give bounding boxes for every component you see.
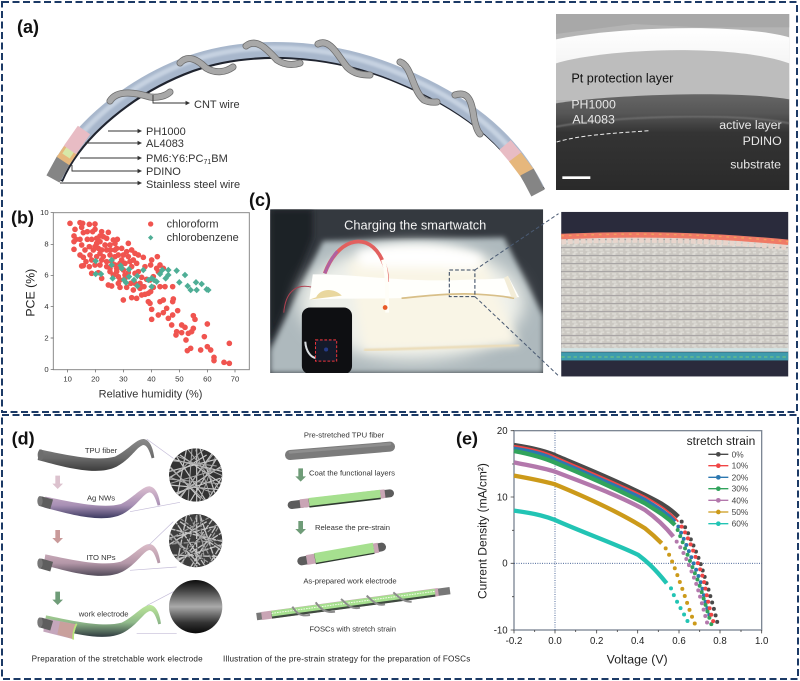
callout labels: AL4083 (146, 138, 184, 150)
panel: (d) preparation of stretchable work electrode (12, 428, 234, 664)
fiber: coated (292, 493, 390, 505)
fiber: TPU (38, 439, 154, 471)
caption: preparation: Preparation of the stretchable work electrode (32, 655, 203, 664)
tick labels (494, 426, 768, 647)
tick labels (40, 208, 239, 383)
fiber fabric strip (309, 274, 519, 300)
zero reference lines (514, 431, 762, 630)
tick labels: 10 (63, 374, 72, 383)
SEM layer labels: AL4083 (572, 113, 615, 127)
callout labels: CNT wire (194, 99, 240, 111)
fiber: pre-stretched: Pre-stretched TPU fiber (304, 430, 385, 439)
chlorobenzene points (93, 258, 211, 292)
smartwatch (302, 308, 352, 374)
legend: 0% (732, 449, 744, 459)
SEM layer labels (571, 72, 782, 171)
curve: 10% (514, 446, 713, 622)
panel: (b) PCE vs humidity scatter (11, 207, 249, 400)
SEM layer labels: active layer (719, 118, 782, 132)
tick labels: 6 (44, 271, 49, 280)
label (b): (b) (11, 207, 34, 227)
text: coat: Coat the functional layers (309, 468, 395, 477)
fiber: as-prepared (302, 547, 382, 561)
caption in photo: Charging the smartwatch (344, 218, 486, 233)
tick labels: 8 (44, 240, 49, 249)
arrow: coat (295, 468, 306, 482)
micrograph: work electrode cylinder (169, 580, 222, 633)
callout labels: BM (211, 153, 228, 165)
legend: 50% (732, 507, 749, 517)
legend: 20% (732, 472, 749, 482)
legend: 60% (732, 519, 749, 529)
connecting wire (325, 241, 387, 282)
tick labels: 30 (119, 374, 128, 383)
curve: 20% (514, 448, 711, 619)
SEM cross-section image (556, 14, 789, 190)
panel border: top section (2, 2, 797, 412)
tick labels: 70 (231, 374, 239, 383)
callout labels: PM6:Y6:PC (146, 153, 203, 165)
panel border: bottom section (2, 415, 798, 679)
arrow: release (295, 521, 306, 534)
tick labels: 2 (44, 333, 49, 342)
panel: (c) smartwatch charging photos (249, 190, 788, 376)
tick labels: 1.0 (755, 636, 768, 647)
micrograph: ITO nanoparticles (169, 514, 222, 568)
photo: fabric close-up (561, 212, 788, 376)
panel: (a) fiber solar cell schematic (17, 17, 538, 193)
fiber: Ag NWs (37, 486, 160, 518)
axis ticks (511, 431, 762, 633)
fiber: ITO NPs (37, 544, 160, 576)
CNT wire helix (110, 43, 480, 134)
y axis title: Current Density (mA/cm²) (476, 463, 490, 599)
tick labels: 60 (203, 374, 212, 383)
plot frame (53, 213, 249, 370)
scale bar (562, 176, 590, 179)
red dashed indicator (316, 340, 337, 361)
SEM layer labels: PH1000 (571, 97, 616, 111)
callout labels: PDINO (146, 166, 181, 178)
y axis title: PCE (%) (23, 269, 37, 317)
tick labels: 4 (44, 302, 49, 311)
SEM layer labels: Pt protection layer (571, 72, 673, 86)
SEM layer labels: substrate (730, 157, 781, 171)
tick labels: 20 (91, 374, 100, 383)
curve: 0% (514, 445, 718, 627)
chloroform points (70, 223, 229, 363)
tick labels: 10 (40, 208, 49, 217)
label (e): (e) (456, 428, 478, 448)
legend: 40% (732, 495, 749, 505)
tick labels: 10 (497, 492, 508, 503)
legend (148, 219, 239, 244)
callout labels: 71 (203, 159, 211, 166)
fiber: Ag NWs: Ag NWs (87, 494, 115, 503)
plot frame (514, 431, 762, 630)
tick labels: 0.2 (590, 636, 603, 647)
fiber: ITO NPs: ITO NPs (86, 553, 116, 562)
dashed interface line (557, 131, 649, 142)
photo: charging the smartwatch (270, 209, 543, 374)
tick labels: 0 (44, 365, 49, 374)
tick labels: 0.6 (672, 636, 686, 647)
legend: stretch strain (687, 434, 755, 448)
curve: 30% (514, 451, 713, 628)
fiber: FOSC with wire (257, 591, 450, 617)
panel: pre-strain strategy illustration (223, 430, 470, 664)
fiber: pre-stretched (290, 430, 390, 455)
tick labels: 0 (502, 559, 508, 570)
tick labels: 20 (497, 426, 508, 437)
text: release: Release the pre-strain (315, 523, 390, 532)
arrow 1 (52, 476, 63, 489)
zoom guide lines (475, 214, 559, 376)
label (c): (c) (249, 190, 271, 210)
SEM layer labels: PDINO (743, 134, 782, 148)
tick labels: 0.8 (713, 636, 727, 647)
arrow 3 (52, 592, 63, 605)
fiber: work electrode: work electrode (78, 609, 129, 618)
x axis title: Voltage (V) (607, 652, 668, 666)
tick labels: -0.2 (506, 636, 522, 647)
tick labels: 40 (147, 374, 156, 383)
curve: 60% (514, 511, 689, 625)
callout labels (146, 99, 240, 191)
connector lines (130, 439, 180, 633)
tick labels: 0.4 (631, 636, 645, 647)
legend: 10% (732, 461, 749, 471)
axis ticks (51, 213, 235, 372)
callout labels: Stainless steel wire (146, 179, 240, 191)
legend (687, 434, 755, 529)
arrow 2 (52, 530, 63, 543)
x axis title: Relative humidity (%) (99, 388, 202, 400)
zoom selection box (449, 270, 475, 297)
callout lines and arrows (60, 95, 189, 184)
legend: chlorobenzene (167, 232, 239, 244)
legend: chloroform (167, 219, 219, 231)
callout labels: PH1000 (146, 126, 186, 138)
tick labels: -10 (494, 625, 508, 636)
tick labels: 0.0 (548, 636, 562, 647)
fiber: work electrode (37, 605, 161, 640)
curve: 50% (514, 476, 696, 626)
legend: 30% (732, 484, 749, 494)
panel: (e) J-V curves (456, 426, 768, 666)
fiber: TPU: TPU fiber (85, 446, 118, 455)
label (a): (a) (17, 17, 39, 37)
curve: 40% (514, 462, 708, 627)
caption: strategy: Illustration of the pre-strain strategy for the preparation of FOSCs (223, 655, 470, 664)
label (d): (d) (12, 428, 35, 448)
micrograph: Ag nanowires (169, 448, 222, 502)
text: FOSCs: FOSCs with stretch strain (309, 625, 396, 634)
text: as-prepared: As-prepared work electrode (303, 576, 397, 585)
tick labels: 50 (175, 374, 184, 383)
curved fiber (53, 48, 538, 193)
